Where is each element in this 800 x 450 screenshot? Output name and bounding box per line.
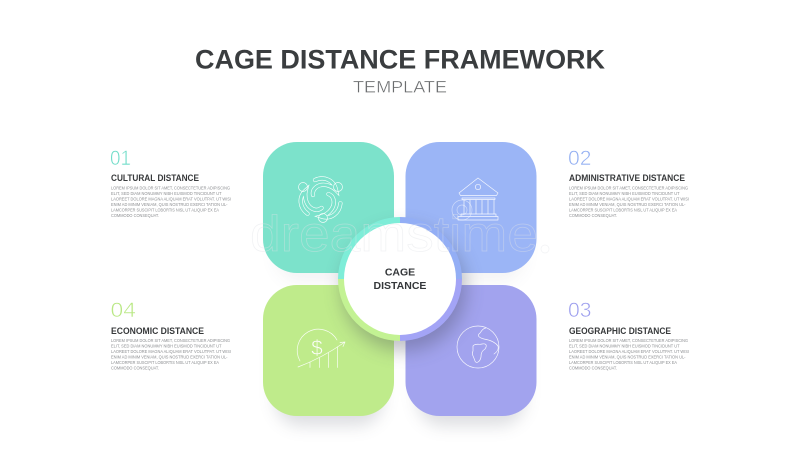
purple card (406, 285, 536, 416)
body text: COMMODO CONSEQUAT. (569, 213, 617, 218)
panel: blue card with administrative icon (406, 142, 536, 273)
number 03: 03 (568, 299, 592, 322)
ring segment: blue (400, 217, 462, 279)
watermark: dreamstime (250, 206, 538, 262)
ring segment: purple (400, 279, 462, 341)
number 02: 02 (568, 147, 592, 170)
heading: administrative distance: ADMINISTRATIVE DISTANCE (569, 173, 685, 183)
body text: ENIM AD MINIM VENIAM, QUIS NOSTRUD EXERCI TATION UL- (111, 354, 228, 360)
number 04: 04 (110, 299, 136, 322)
body text: LAOREET DOLORE MAGNA ALIQUAM ERAT VOLUTPAT. UT WISI (111, 349, 231, 354)
panel: cultural distance text (110, 147, 231, 218)
icon: globe (457, 326, 499, 368)
body text (111, 338, 231, 370)
icon: government building (458, 178, 498, 220)
body text: COMMODO CONSEQUAT. (111, 366, 159, 370)
panel: economic distance text (110, 299, 231, 370)
white centre disc (344, 223, 456, 335)
panel: purple card with geographic icon (406, 285, 536, 416)
heading: economic distance: ECONOMIC DISTANCE (111, 326, 204, 336)
blue card (406, 142, 536, 273)
body text: LAMCORPER SUSCIPIT LOBORTIS NISL UT ALIQUIP EX EA (111, 208, 219, 212)
body text (569, 186, 689, 218)
body text: LAMCORPER SUSCIPIT LOBORTIS NISL UT ALIQUIP EX EA (569, 208, 677, 212)
panel: administrative distance text (568, 147, 689, 218)
body text: ELIT, SED DIAM NONUMMY NIBH EUISMOD TINCIDUNT UT (569, 191, 680, 196)
centre circle shadow (342, 227, 466, 351)
teal card (263, 142, 394, 273)
body text: LAOREET DOLORE MAGNA ALIQUAM ERAT VOLUTPAT. UT WISI (569, 196, 689, 202)
green card (263, 285, 394, 416)
body text: LOREM IPSUM DOLOR SIT AMET, CONSECTETUER ADIPISCING (111, 338, 231, 343)
body text: ELIT, SED DIAM NONUMMY NIBH EUISMOD TINCIDUNT UT (569, 344, 680, 348)
body text: COMMODO CONSEQUAT. (111, 213, 159, 218)
centre ring (338, 217, 462, 341)
panel: teal card with cultural icon (263, 142, 394, 273)
number 01: 01 (110, 147, 131, 170)
centre label: CAGE (385, 266, 415, 278)
ring segment: green (338, 279, 400, 341)
body text: LOREM IPSUM DOLOR SIT AMET, CONSECTETUER ADIPISCING (569, 338, 689, 343)
body text: LOREM IPSUM DOLOR SIT AMET, CONSECTETUER ADIPISCING (111, 186, 231, 190)
body text: ENIM AD MINIM VENIAM, QUIS NOSTRUD EXERCI TATION UL- (111, 202, 228, 207)
subtitle: TEMPLATE (353, 78, 447, 96)
body text (569, 338, 689, 370)
centre label (374, 266, 426, 292)
panel: geographic distance text (568, 299, 689, 370)
body text (111, 186, 231, 218)
title: CAGE DISTANCE FRAMEWORK (195, 44, 606, 74)
icon: dollar growth chart: $ (311, 337, 323, 360)
body text: ELIT, SED DIAM NONUMMY NIBH EUISMOD TINCIDUNT UT (111, 344, 222, 348)
body text: LAMCORPER SUSCIPIT LOBORTIS NISL UT ALIQUIP EX EA (111, 360, 219, 365)
body text: ENIM AD MINIM VENIAM, QUIS NOSTRUD EXERCI TATION UL- (569, 354, 686, 360)
body text: LAOREET DOLORE MAGNA ALIQUAM ERAT VOLUTPAT. UT WISI (111, 196, 231, 202)
body text: ELIT, SED DIAM NONUMMY NIBH EUISMOD TINCIDUNT UT (111, 191, 222, 196)
body text: LAMCORPER SUSCIPIT LOBORTIS NISL UT ALIQUIP EX EA (569, 360, 677, 365)
card shadows (275, 170, 525, 426)
heading: cultural distance: CULTURAL DISTANCE (111, 173, 199, 183)
body text: COMMODO CONSEQUAT. (569, 366, 617, 370)
body text: LAOREET DOLORE MAGNA ALIQUAM ERAT VOLUTPAT. UT WISI (569, 349, 689, 354)
ring segment: teal (338, 217, 400, 279)
body text: ENIM AD MINIM VENIAM, QUIS NOSTRUD EXERCI TATION UL- (569, 202, 686, 207)
centre label: DISTANCE (374, 280, 426, 292)
icon: cultural people swirl (296, 178, 343, 222)
watermark logo ring (452, 200, 472, 220)
body text: LOREM IPSUM DOLOR SIT AMET, CONSECTETUER ADIPISCING (569, 186, 689, 190)
panel: green card with economic icon (263, 285, 394, 416)
heading: geographic distance: GEOGRAPHIC DISTANCE (569, 326, 671, 336)
